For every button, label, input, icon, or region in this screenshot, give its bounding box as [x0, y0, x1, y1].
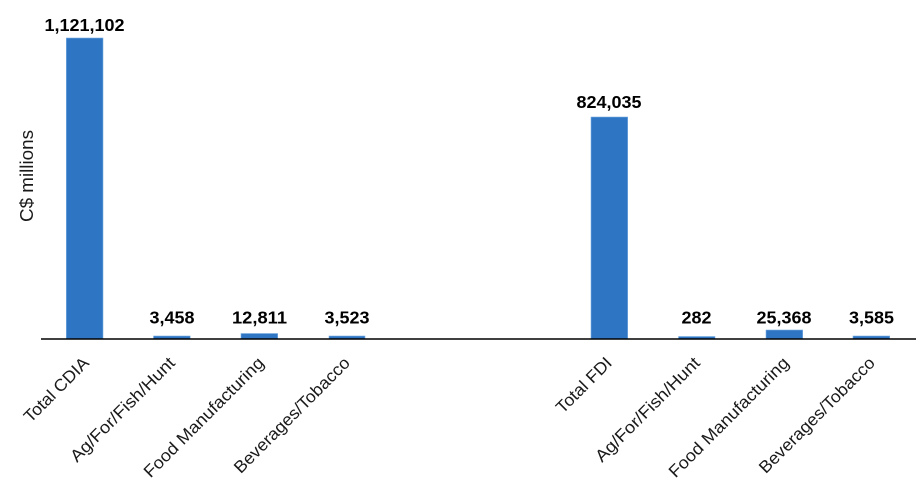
bar: CDIA Food Manufacturing — [241, 334, 278, 339]
category label: CDIA Beverages/Tobacco: Beverages/Tobacco — [230, 353, 354, 477]
category label: FDI Beverages/Tobacco: Beverages/Tobacco — [755, 353, 879, 477]
bar: FDI Ag/For/Fish/Hunt — [678, 336, 715, 339]
category label: Total FDI: Total FDI — [552, 353, 616, 417]
bar: Total CDIA — [66, 38, 103, 339]
bar: CDIA Beverages/Tobacco — [329, 336, 365, 339]
bar: FDI Food Manufacturing — [766, 330, 803, 339]
value label: Total CDIA: 1,121,102 — [44, 15, 125, 35]
value label: CDIA Ag/For/Fish/Hunt: 3,458 — [150, 308, 195, 328]
value label: Total FDI: 824,035 — [576, 92, 642, 112]
bar: CDIA Ag/For/Fish/Hunt — [154, 336, 190, 339]
category label: CDIA Ag/For/Fish/Hunt: Ag/For/Fish/Hunt — [66, 353, 179, 466]
value label: CDIA Beverages/Tobacco: 3,523 — [324, 308, 370, 328]
category label: CDIA Food Manufacturing: Food Manufacturing — [140, 353, 268, 481]
bar: Total FDI — [591, 117, 628, 339]
bar: FDI Beverages/Tobacco — [853, 336, 890, 339]
value label: FDI Food Manufacturing: 25,368 — [756, 308, 812, 328]
category label: FDI Food Manufacturing: Food Manufacturing — [665, 353, 793, 481]
category label: FDI Ag/For/Fish/Hunt: Ag/For/Fish/Hunt — [591, 353, 704, 466]
value label: CDIA Food Manufacturing: 12,811 — [232, 308, 287, 328]
value label: FDI Beverages/Tobacco: 3,585 — [849, 308, 894, 328]
category label: Total CDIA: Total CDIA — [20, 353, 93, 426]
value label: FDI Ag/For/Fish/Hunt: 282 — [682, 308, 712, 328]
y axis title: C$ millions — [16, 130, 37, 222]
